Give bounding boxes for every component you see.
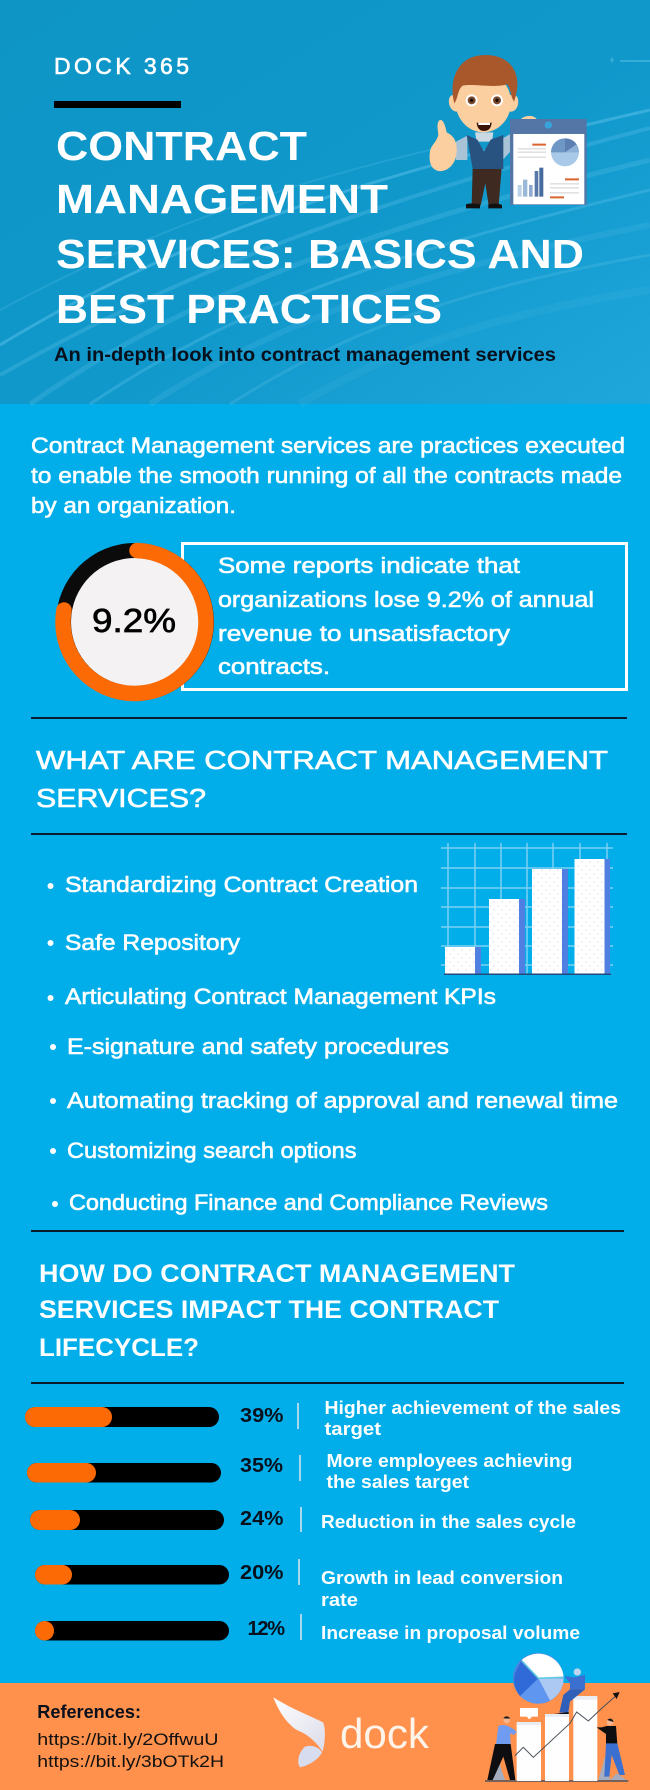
title: SERVICES: BASICS AND — [56, 231, 584, 277]
references: https://bit.ly/2OffwuU — [37, 1730, 218, 1749]
callout box: organizations lose 9.2% of annual — [218, 587, 594, 612]
stat row: 35% — [27, 1451, 572, 1492]
panel: footer — [0, 1653, 650, 1790]
stat row: 12%: 12% — [248, 1618, 285, 1640]
list item 3: Articulating Contract Management KPIs — [65, 984, 496, 1009]
heading: how do contract management services impact: HOW DO CONTRACT MANAGEMENT — [39, 1260, 515, 1288]
stat row: 20%: 20% — [240, 1562, 284, 1584]
stat row: 35%: 35% — [240, 1455, 283, 1477]
stat row: 12%: Increase in proposal volume — [321, 1623, 580, 1643]
heading: what are contract management services — [36, 745, 608, 813]
list item 2: Safe Repository — [65, 930, 240, 955]
logo: dock — [273, 1697, 430, 1767]
title: CONTRACT — [56, 123, 307, 169]
callout box: revenue to unsatisfactory — [218, 621, 510, 646]
stat row: 35%: More employees achieving — [326, 1451, 572, 1471]
stat row: 12% — [35, 1614, 580, 1643]
heading: how do contract management services impact — [39, 1260, 515, 1362]
heading: what are contract management services: SERVICES? — [36, 783, 206, 813]
divider — [31, 1382, 624, 1384]
heading: how do contract management services impact: SERVICES IMPACT THE CONTRACT — [39, 1296, 499, 1324]
stat row: 24%: 24% — [240, 1508, 284, 1530]
title: BEST PRACTICES — [56, 286, 442, 332]
callout box — [182, 544, 626, 690]
list item 5: Automating tracking of approval and renewal time — [67, 1088, 618, 1113]
subtitle: An in-depth look into contract management services — [54, 345, 556, 366]
panel: services list — [48, 843, 618, 1215]
title — [56, 123, 584, 332]
title: MANAGEMENT — [56, 176, 388, 222]
panel: header — [0, 0, 650, 404]
callout box: Some reports indicate that — [218, 553, 520, 578]
intro text: by an organization. — [31, 493, 236, 518]
intro text — [31, 433, 625, 518]
list item 6: Customizing search options — [67, 1138, 356, 1163]
stat row: 39% — [25, 1398, 621, 1439]
donut chart: 9.2% — [56, 543, 214, 701]
intro text: Contract Management services are practices executed — [31, 433, 625, 458]
references: https://bit.ly/3bOTk2H — [37, 1752, 224, 1771]
list item 1: Standardizing Contract Creation — [65, 872, 418, 897]
divider — [31, 1230, 624, 1232]
panel: impact statistics — [25, 1398, 621, 1643]
icon: man with thumbs up holding report board — [430, 55, 587, 208]
stat row: 24%: Reduction in the sales cycle — [321, 1512, 576, 1532]
stat row: 24% — [30, 1507, 576, 1532]
stat row: 39%: Higher achievement of the sales — [324, 1398, 621, 1418]
icon: rising bar chart — [441, 843, 613, 975]
references: References: — [37, 1702, 141, 1722]
panel: introduction — [31, 433, 626, 701]
list item 4: E-signature and safety procedures — [67, 1034, 449, 1059]
stat row: 39%: 39% — [240, 1405, 284, 1427]
list item 7: Conducting Finance and Compliance Reviews — [69, 1190, 548, 1215]
heading: how do contract management services impact: LIFECYCLE? — [39, 1334, 199, 1362]
stat row: 39%: target — [324, 1419, 381, 1439]
stat row: 20%: rate — [321, 1590, 358, 1610]
icon: team building charts with pie — [485, 1653, 628, 1782]
logo: dock: dock — [340, 1710, 430, 1757]
intro text: to enable the smooth running of all the contracts made — [31, 463, 622, 488]
footer background — [0, 1683, 650, 1790]
stat row: 35%: the sales target — [326, 1472, 469, 1492]
donut chart: 9.2%: 9.2% — [92, 602, 176, 639]
stat row: 20%: Growth in lead conversion — [321, 1568, 563, 1588]
accent bar — [54, 101, 181, 108]
header background with light streaks — [0, 0, 650, 404]
references — [37, 1702, 224, 1771]
divider — [31, 717, 627, 719]
brand label: DOCK 365 — [54, 53, 189, 79]
callout box: contracts. — [218, 654, 330, 679]
stat row: 20% — [35, 1559, 563, 1610]
heading: what are contract management services: WHAT ARE CONTRACT MANAGEMENT — [36, 745, 608, 775]
divider — [31, 833, 627, 835]
